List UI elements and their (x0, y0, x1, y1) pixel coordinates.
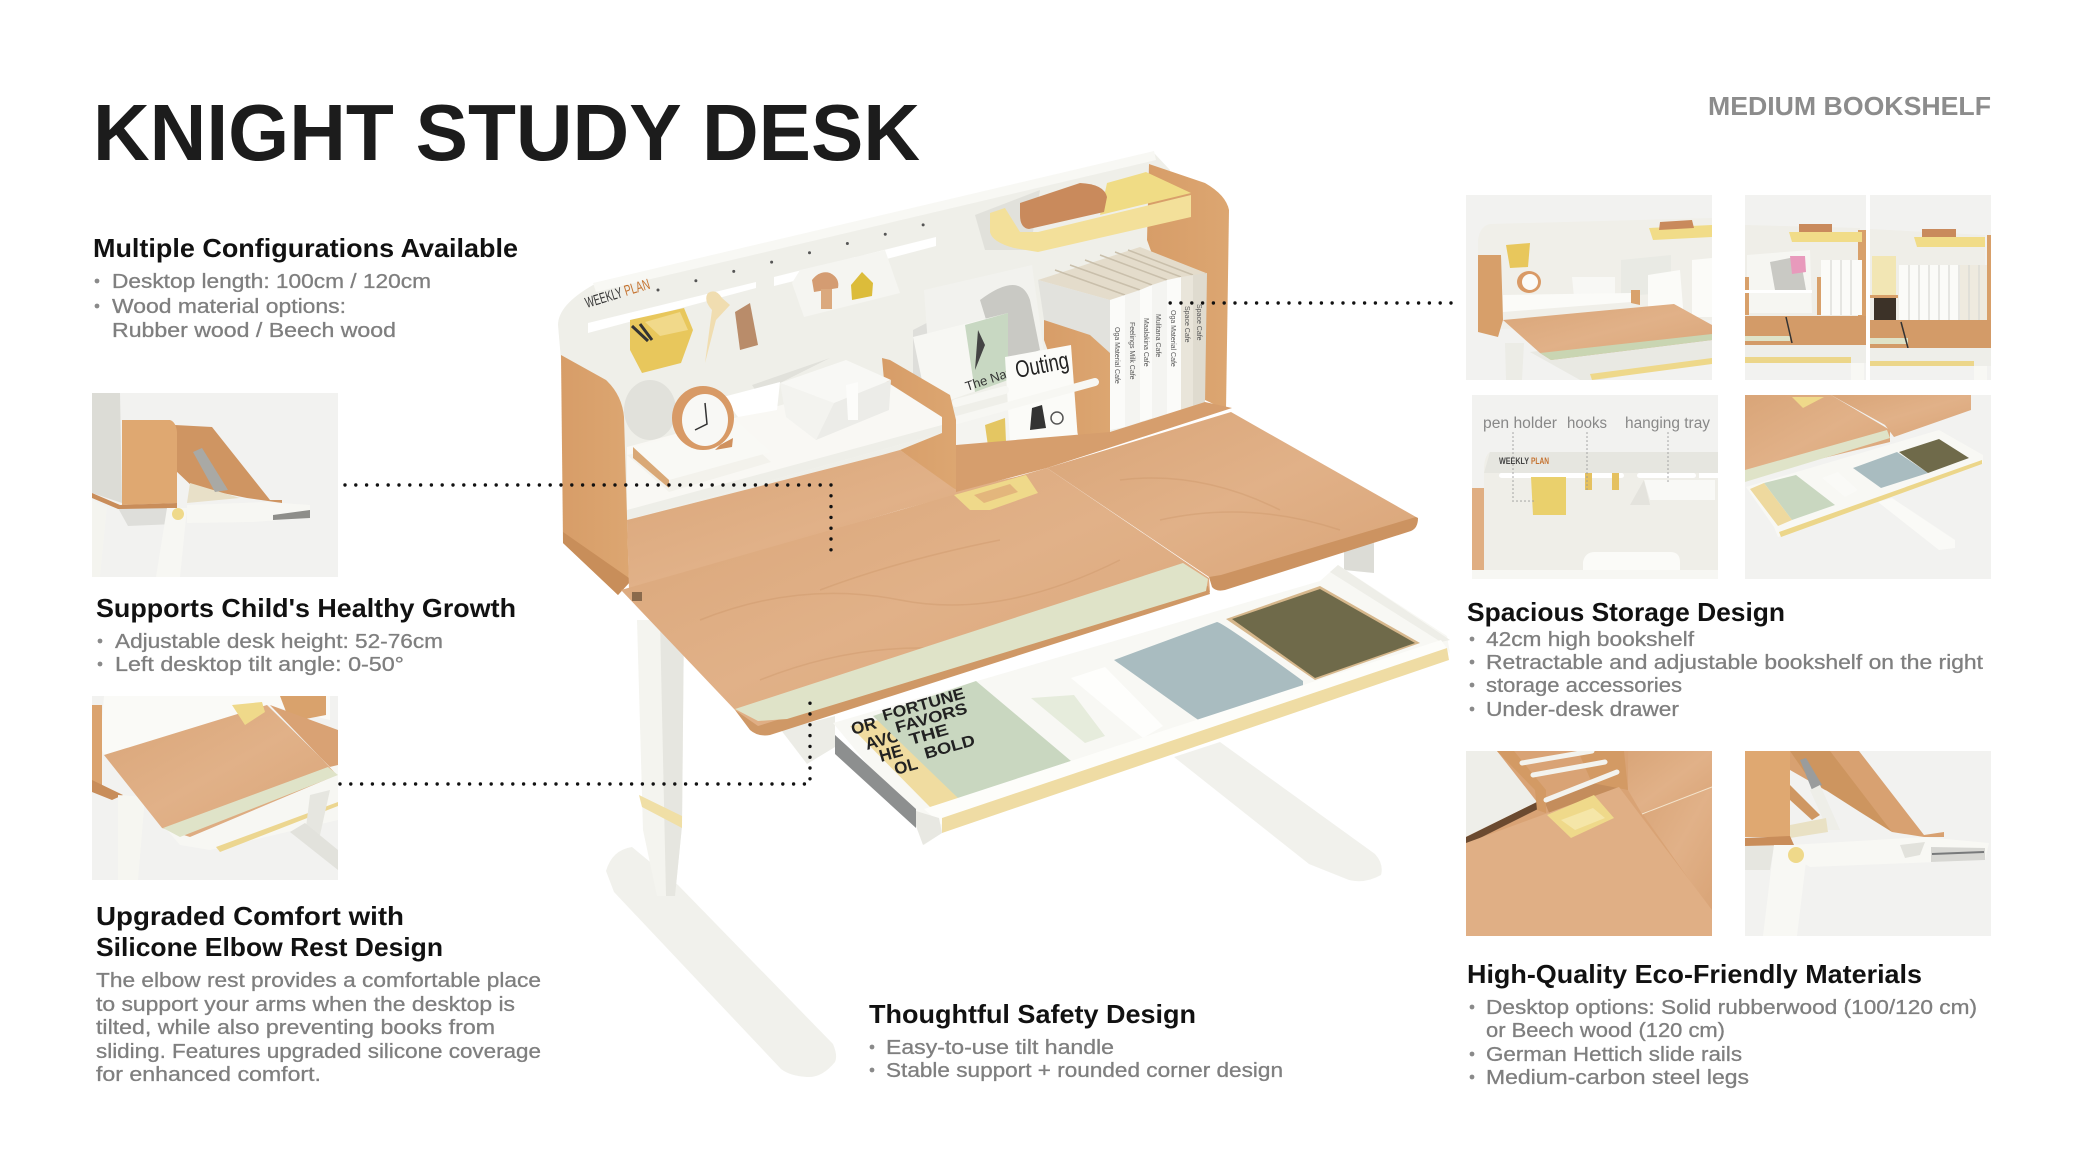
bullet list: Under-desk drawer (1486, 699, 1679, 721)
book stack (1038, 247, 1207, 440)
wood block (1020, 183, 1107, 229)
bullet list: Wood material options: (112, 296, 346, 318)
bullet list: Desktop options: Solid rubberwood (100/120 cm) (1486, 997, 1977, 1019)
left desktop (621, 468, 1210, 735)
bullet list: Easy-to-use tilt handle (886, 1037, 1114, 1059)
drawer rail (835, 735, 916, 828)
left divider (882, 358, 956, 490)
photo: storage accessories labels: PLAN (1531, 456, 1549, 466)
colour pencil tin (1114, 622, 1303, 721)
right divider (1044, 320, 1110, 443)
bullet list: Stable support + rounded corner design (886, 1060, 1283, 1082)
heading: High-Quality Eco-Friendly Materials (1467, 959, 1922, 989)
paragraph: tilted, while also preventing books from (96, 1017, 495, 1039)
panel: thoughtful safety (869, 999, 1283, 1082)
back magazine (924, 265, 1044, 400)
bullet list (95, 271, 431, 342)
dotted callout: bookshelf (1167, 301, 1451, 305)
elbow rest (735, 563, 1208, 721)
hanging tray (792, 250, 900, 317)
yellow book: HE (877, 741, 905, 766)
wall shadow (913, 270, 1040, 400)
bullet list: Desktop length: 100cm / 120cm (112, 271, 431, 293)
tilt handle (954, 475, 1038, 510)
accessory labels: hanging tray (1625, 415, 1710, 432)
panel: healthy growth (96, 593, 516, 676)
bullet list: Adjustable desk height: 52-76cm (115, 631, 443, 653)
pen holder (1531, 477, 1566, 515)
title: KNIGHT STUDY DESK (93, 88, 920, 177)
card (1071, 667, 1163, 738)
panel: upgraded comfort (96, 901, 541, 1086)
book spine titles: Oga Material Cafe (1169, 310, 1176, 367)
heading: Spacious Storage Design (1467, 597, 1785, 627)
botanical magazine: The Nature (963, 359, 1030, 394)
book spine titles: Space Cafe (1195, 304, 1202, 341)
paragraph: for enhanced comfort. (96, 1064, 321, 1086)
right bracket (1344, 543, 1374, 573)
outing book (1005, 345, 1078, 458)
pencil box (1031, 695, 1105, 743)
accessory labels (1483, 415, 1710, 432)
tray (1644, 480, 1715, 500)
panel: eco-friendly materials (1467, 959, 1977, 1089)
storage box (780, 360, 891, 440)
dotted callout: tilt (345, 485, 831, 557)
hanging tag (735, 303, 758, 350)
bullet list: storage accessories (1486, 675, 1682, 697)
desk back ledge (956, 402, 1232, 492)
desktop edge (735, 586, 1210, 735)
bullet list: or Beech wood (120 cm) (1486, 1020, 1725, 1042)
house toy (851, 272, 873, 300)
left column (637, 620, 684, 896)
shelf (627, 378, 942, 520)
drawer (833, 565, 1450, 845)
photo: tilt handle closeup (1466, 751, 1712, 936)
lemon print (985, 418, 1006, 446)
photo: bookshelf front three-quarter (1466, 195, 1712, 380)
photo: tilt mechanism closeup (1745, 751, 1991, 936)
bullet list: Rubber wood / Beech wood (112, 320, 396, 342)
paragraph: The elbow rest provides a comfortable place (96, 970, 541, 992)
bullet list (870, 1037, 1283, 1082)
book spine titles: Mulitana Cafe (1154, 314, 1161, 357)
weekly plan label: WEEKLY (583, 284, 625, 312)
object shadows (624, 190, 1040, 440)
paragraph: sliding. Features upgraded silicone coverage (96, 1041, 541, 1063)
slots (588, 282, 756, 333)
mushroom toy (812, 272, 838, 309)
QR mark (632, 592, 642, 601)
heading: Silicone Elbow Rest Design (96, 932, 443, 962)
scissors (705, 291, 730, 363)
paragraph (96, 970, 541, 1086)
backboard (558, 151, 1205, 530)
green book (873, 681, 1071, 799)
accessory labels: hooks (1567, 415, 1607, 432)
bullet list: Left desktop tilt angle: 0-50° (115, 654, 404, 676)
heading: Multiple Configurations Available (93, 233, 518, 263)
leader lines (1513, 433, 1668, 501)
accessory labels: pen holder (1483, 415, 1557, 432)
white rods (956, 382, 1095, 420)
drawer front (924, 640, 1450, 825)
bullet list: Medium-carbon steel legs (1486, 1067, 1749, 1089)
left wood side (561, 355, 629, 595)
yellow book (849, 714, 959, 807)
book spine titles: Space Cafe (1183, 306, 1190, 343)
weekly plan: WEEKLY (1499, 456, 1529, 466)
book spine titles (1113, 304, 1202, 384)
green book: FAVORS (893, 700, 970, 737)
heading: Supports Child's Healthy Growth (96, 593, 516, 623)
right foot (1174, 742, 1382, 881)
back desktop strip (627, 450, 1047, 590)
schedule line (658, 222, 935, 290)
photo: shelf left position (1745, 195, 1866, 380)
photo: shelf right position (1870, 195, 1991, 380)
pen holder (630, 308, 693, 373)
book spine titles: Maalakina Cafe (1142, 318, 1149, 367)
hooks (1585, 473, 1619, 490)
under-desk support (781, 716, 835, 764)
photo: tilt mechanism side view (92, 393, 338, 577)
green book: FORTUNE (880, 685, 967, 725)
book spine titles: Feelings Milk Cafe (1128, 322, 1135, 380)
paragraph: to support your arms when the desktop is (96, 994, 515, 1016)
backboard: PLAN (622, 276, 652, 300)
outing book: Outing (1013, 347, 1071, 384)
dotted callout: elbow rest (340, 695, 810, 784)
yellow book: AVC (863, 726, 901, 754)
heading: Thoughtful Safety Design (869, 999, 1196, 1029)
brown notebook (1226, 586, 1420, 680)
heading (96, 901, 443, 962)
bullet list (1470, 997, 1977, 1089)
green book: BOLD (922, 732, 977, 763)
bullet list (1470, 629, 1983, 721)
bullet list: 42cm high bookshelf (1486, 629, 1694, 651)
right desktop (1047, 412, 1418, 591)
books under clock (627, 422, 771, 492)
main desk illustration (558, 151, 1450, 1077)
bottom poster (956, 405, 1012, 463)
yellow tray (990, 172, 1191, 252)
yellow book: OL (892, 754, 920, 779)
photo: open drawer (1745, 395, 1991, 579)
bullet list (98, 631, 443, 676)
yellow book: OR (849, 714, 879, 739)
heading: Upgraded Comfort with (96, 901, 404, 931)
subtitle: medium bookshelf: MEDIUM BOOKSHELF (1708, 91, 1991, 121)
photo: tilted desktop (92, 696, 338, 880)
right wood side (1147, 164, 1229, 410)
panel: multiple configurations (93, 233, 518, 342)
bullet list: German Hettich slide rails (1486, 1044, 1742, 1066)
clock (672, 386, 734, 450)
green book: THE (907, 722, 951, 749)
left foot (606, 847, 836, 1077)
botanical magazine (913, 313, 1030, 400)
bullet list: Retractable and adjustable bookshelf on the right (1486, 652, 1983, 674)
panel: spacious storage (1467, 597, 1983, 721)
photo: storage accessories labels (1472, 395, 1718, 579)
book spine titles: Oga Material Cafe (1113, 327, 1120, 384)
